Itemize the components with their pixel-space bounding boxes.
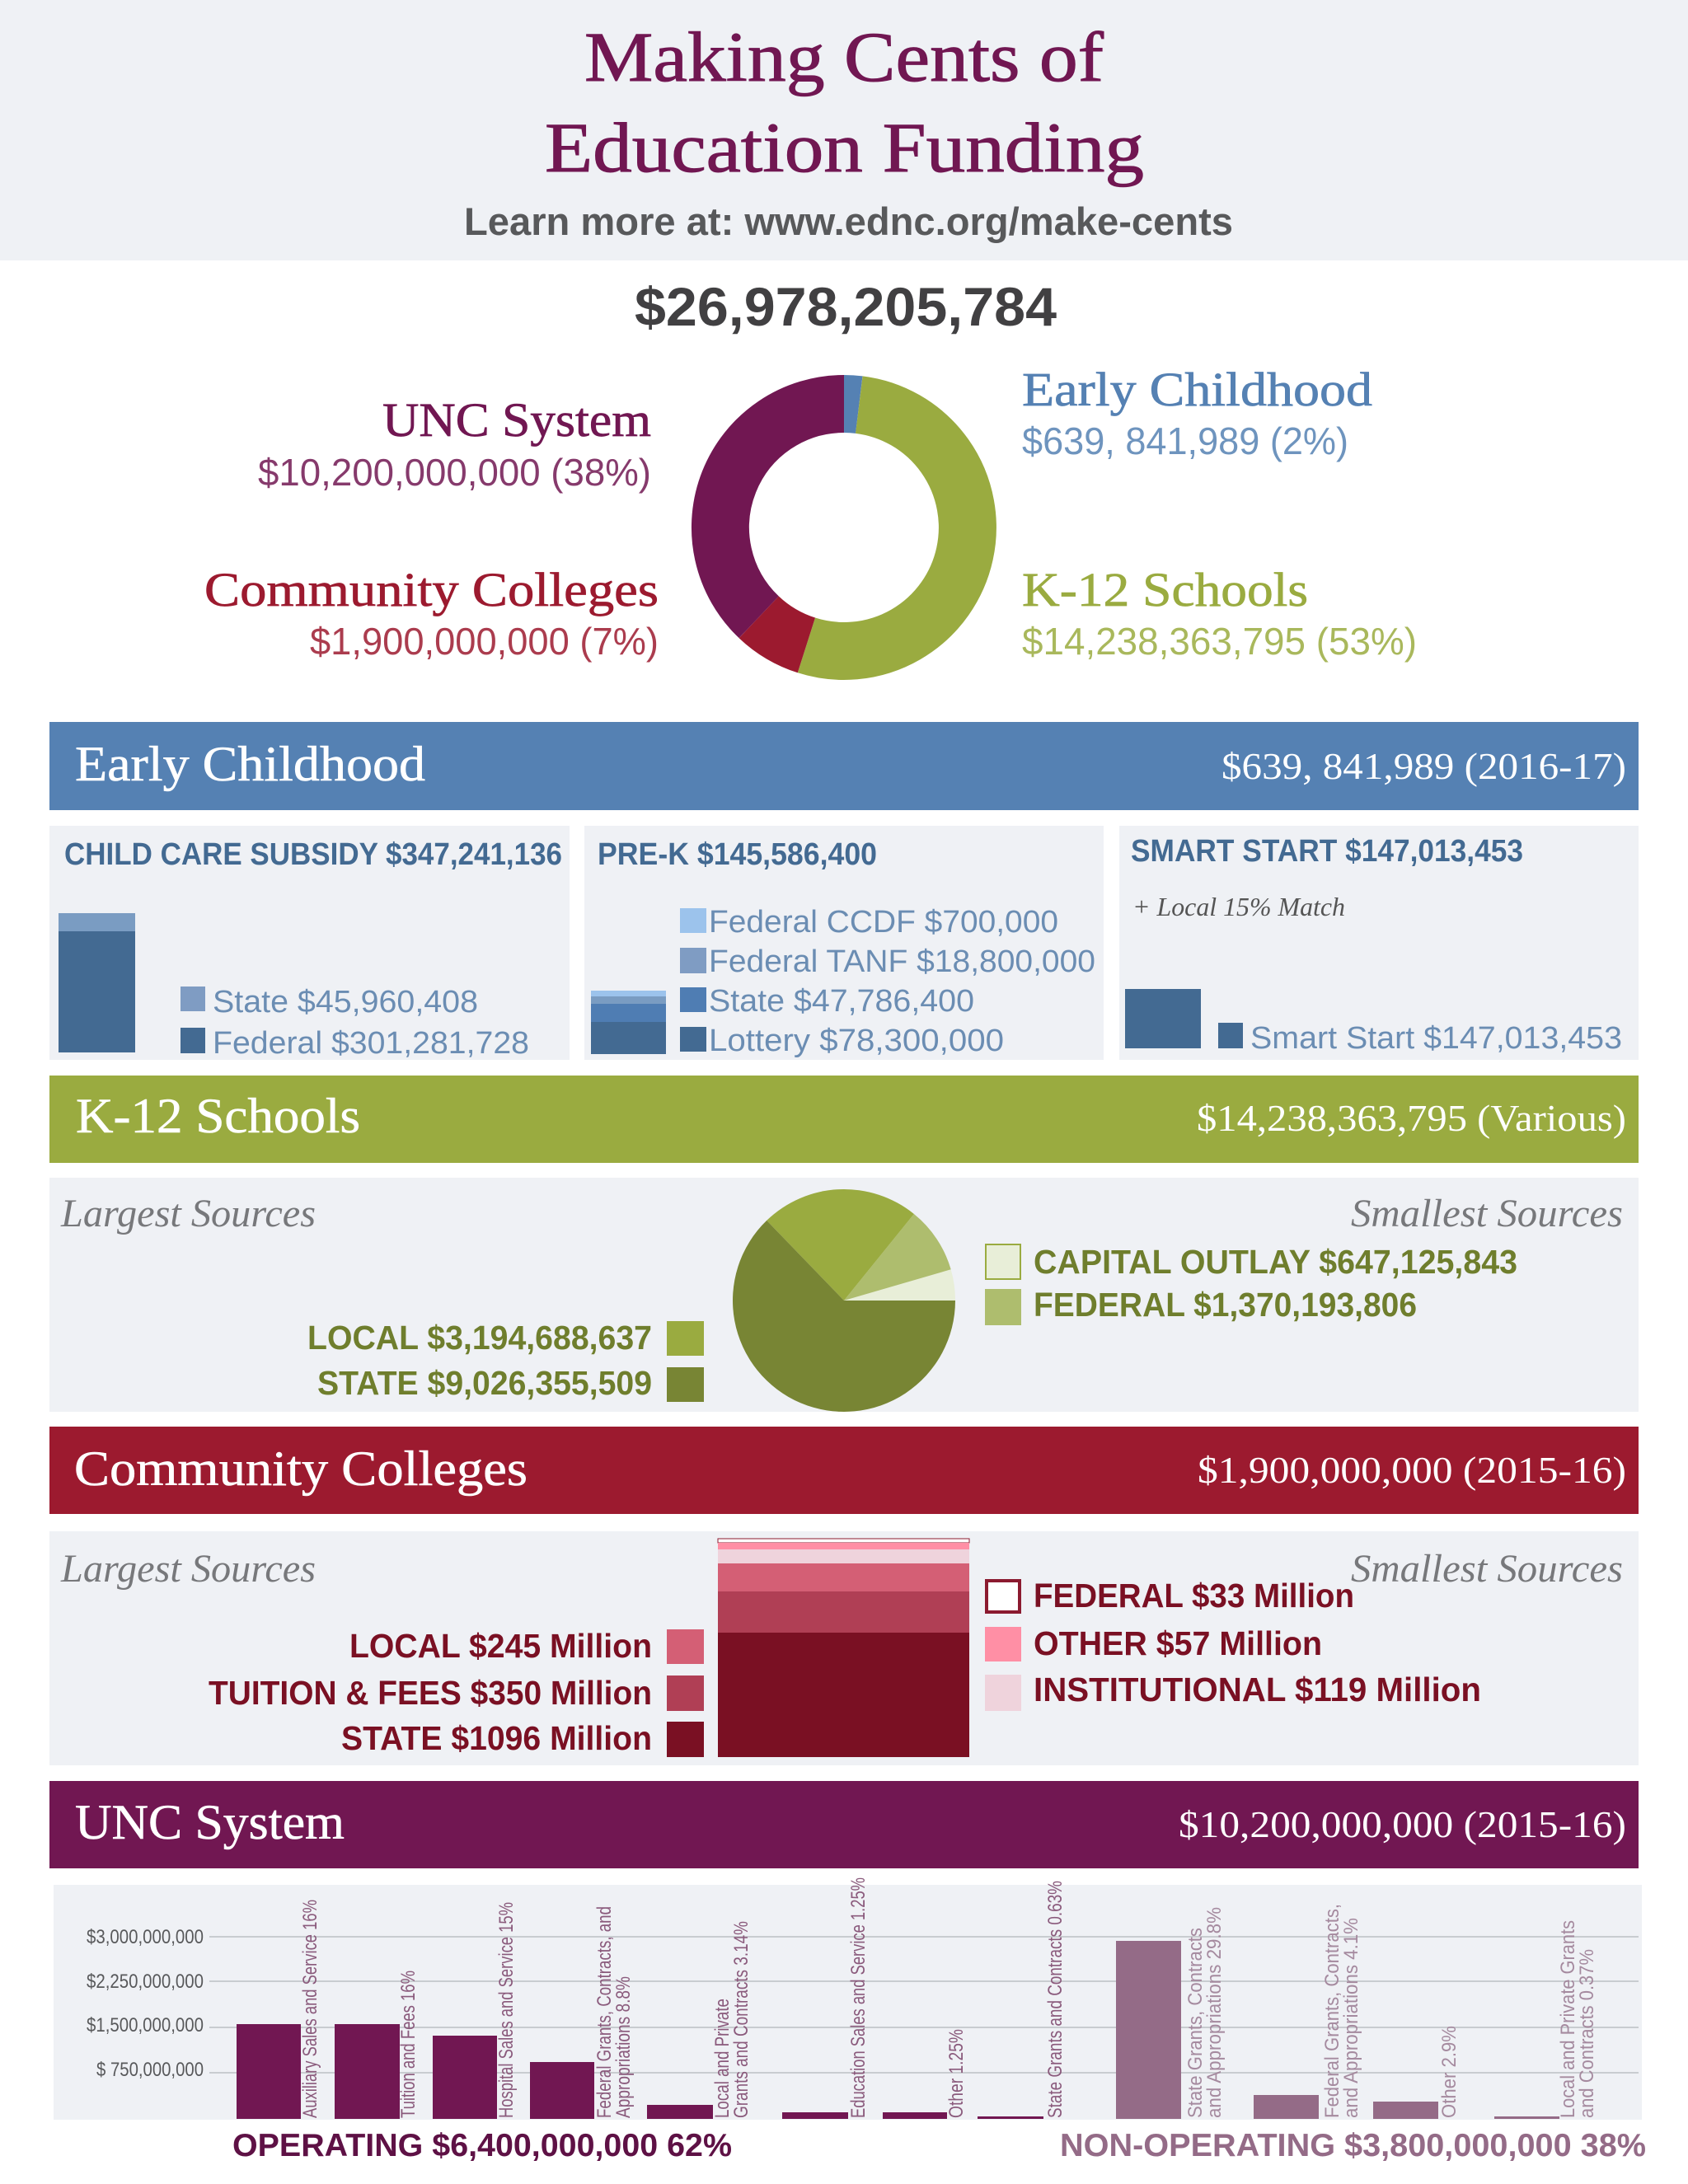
panel: UNC System bar chart [54,1877,1642,2120]
legend: child care: Federal $301,281,728 [213,1026,529,1061]
section header: UNC System [49,1781,1639,1868]
rotated bar labels: non-operating: and Contracts 0.37% [1576,1949,1598,2118]
legend: child care: State $45,960,408 [213,985,478,1019]
legend: pre-k: State $47,786,400 [709,984,974,1019]
legend: smallest K-12 sources: FEDERAL $1,370,193,806 [1034,1286,1417,1324]
legend: smallest K-12 sources [985,1243,1517,1325]
rotated bar labels: operating: Tuition and Fees 16% [397,1971,420,2118]
section header: Community Colleges: Community Colleges [74,1441,528,1496]
section header: Early Childhood: $639, 841,989 (2016-17) [1221,745,1626,787]
y-axis gridlines and labels: $1,500,000,000 [87,2014,204,2036]
title: Education Funding [545,108,1144,187]
rotated bar labels: operating: State Grants and Contracts 0.63% [1044,1881,1067,2118]
rotated bar labels: operating: Other 1.25% [945,2029,968,2118]
donut chart: total funding split [720,404,968,651]
legend: largest K-12 sources [307,1319,704,1402]
rotated bar labels: non-operating: Federal Grants, Contracts, [1321,1904,1343,2118]
legend: largest K-12 sources: STATE $9,026,355,509 [317,1364,652,1402]
donut label: Community Colleges: Community Colleges [204,563,659,616]
panel: K-12 sources: Largest Sources [60,1192,316,1235]
bars: non-operating [1116,1941,1559,2119]
donut label: Early Childhood [1022,363,1372,462]
section header: Early Childhood [49,722,1639,810]
legend: smallest community college sources [985,1577,1481,1711]
section header: Community Colleges: $1,900,000,000 (2015-16) [1198,1449,1626,1491]
section header: Community Colleges [49,1427,1639,1514]
panel: child care subsidy [49,826,570,1061]
y-axis gridlines and labels: $ 750,000,000 [96,2059,204,2081]
legend: smallest community college sources: FEDERAL $33 Million [1034,1577,1354,1615]
title [545,17,1144,187]
legend: largest community college sources [209,1627,704,1757]
legend: smart start: Smart Start $147,013,453 [1250,1021,1622,1056]
grand total: $26,978,205,784 [635,276,1057,337]
stacked bar: child care [59,913,135,1052]
donut label: K-12 Schools: $14,238,363,795 (53%) [1022,620,1417,663]
legend: smallest community college sources: OTHER $57 Million [1034,1624,1322,1662]
rotated bar labels: operating: Grants and Contracts 3.14% [730,1921,753,2118]
rotated bar labels: operating: Federal Grants, Contracts, and [593,1906,616,2118]
legend: pre-k [680,905,1095,1058]
panel: K-12 sources: Smallest Sources [1351,1192,1623,1235]
donut label: Community Colleges: $1,900,000,000 (7%) [310,620,659,663]
rotated bar labels: non-operating: Local and Private Grants [1557,1920,1579,2118]
y-axis gridlines and labels [87,1926,1639,2081]
subtitle: Learn more at: www.ednc.org/make-cents [464,199,1233,243]
chart caption: operating total: OPERATING $6,400,000,000 62% [232,2128,732,2163]
panel: pre-k [584,826,1104,1060]
legend: smallest K-12 sources: CAPITAL OUTLAY $647,125,843 [1034,1243,1517,1281]
panel: smart start: + Local 15% Match [1132,892,1345,921]
legend: pre-k: Federal TANF $18,800,000 [709,944,1095,979]
rotated bar labels: operating: Appropriations 8.8% [612,1976,635,2118]
legend: largest K-12 sources: LOCAL $3,194,688,637 [307,1319,652,1357]
donut label: UNC System: $10,200,000,000 (38%) [258,451,651,494]
bars: operating [237,2024,1043,2119]
legend: largest community college sources: TUITION & FEES $350 Million [209,1674,652,1712]
title: Making Cents of [584,17,1104,96]
y-axis gridlines and labels: $3,000,000,000 [87,1926,204,1948]
donut label: Community Colleges [204,563,659,663]
donut label: K-12 Schools [1022,563,1417,663]
legend: pre-k: Federal CCDF $700,000 [709,905,1058,940]
donut label: Early Childhood: Early Childhood [1022,363,1372,416]
rotated bar labels: non-operating [1184,1904,1598,2118]
legend: largest community college sources: LOCAL $245 Million [349,1627,652,1665]
donut label: K-12 Schools: K-12 Schools [1022,563,1308,616]
panel: community college sources [49,1531,1639,1765]
rotated bar labels: non-operating: and Appropriations 29.8% [1203,1907,1226,2118]
panel: community college sources: Smallest Sources [1351,1547,1623,1591]
bar: smart start [1125,989,1201,1048]
header band [0,0,1688,260]
panel: community college sources: Largest Sources [60,1547,316,1591]
section header: K-12 Schools [49,1076,1639,1163]
donut label: Early Childhood: $639, 841,989 (2%) [1022,419,1348,462]
rotated bar labels: non-operating: State Grants, Contracts [1184,1928,1207,2118]
legend: largest community college sources: STATE $1096 Million [341,1719,652,1757]
donut label: UNC System: UNC System [382,393,651,447]
stacked bar: pre-k [591,991,666,1054]
stacked bar: community college sources [718,1539,969,1757]
rotated bar labels: operating: Hospital Sales and Service 15% [495,1902,518,2118]
rotated bar labels: non-operating: and Appropriations 4.1% [1340,1918,1362,2118]
panel: child care subsidy: CHILD CARE SUBSIDY $347,241,136 [64,837,562,872]
panel: K-12 sources [49,1178,1639,1412]
section header: UNC System: UNC System [75,1795,345,1849]
rotated bar labels: operating: Local and Private [711,1999,734,2118]
section header: K-12 Schools: K-12 Schools [76,1089,360,1143]
legend: smallest community college sources: INSTITUTIONAL $119 Million [1034,1671,1481,1708]
pie chart: K-12 sources [733,1189,955,1412]
y-axis gridlines and labels: $2,250,000,000 [87,1971,204,1993]
section header: K-12 Schools: $14,238,363,795 (Various) [1197,1097,1626,1139]
chart caption: non-operating total: NON-OPERATING $3,800,000,000 38% [1060,2128,1646,2163]
rotated bar labels: operating [299,1877,1067,2118]
panel: smart start: SMART START $147,013,453 [1131,834,1523,869]
section header: UNC System: $10,200,000,000 (2015-16) [1179,1803,1626,1845]
rotated bar labels: operating: Auxiliary Sales and Service 16% [299,1900,321,2118]
rotated bar labels: operating: Education Sales and Service 1.25% [847,1877,870,2118]
legend: child care [181,985,529,1061]
donut label: UNC System [258,393,651,494]
legend: pre-k: Lottery $78,300,000 [709,1024,1004,1058]
panel: pre-k: PRE-K $145,586,400 [598,837,877,872]
section header: Early Childhood: Early Childhood [75,737,425,791]
panel: smart start [1119,826,1639,1060]
rotated bar labels: non-operating: Other 2.9% [1438,2026,1461,2118]
